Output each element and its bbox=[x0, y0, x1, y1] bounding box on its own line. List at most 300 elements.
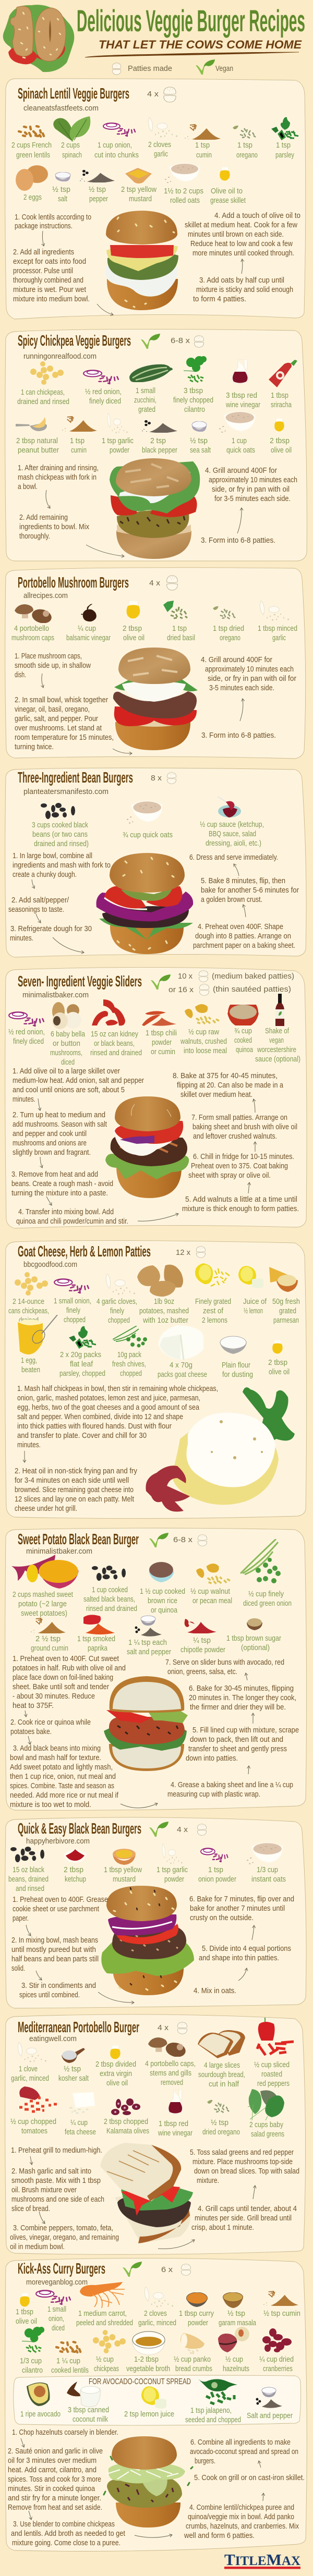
step 2: smooth paste. Mix with 1 tbsp bbox=[11, 2177, 101, 2185]
arrow bbox=[32, 880, 34, 888]
step 4 bbox=[16, 1208, 128, 1226]
arrow bbox=[243, 905, 246, 917]
step 1: 1. After draining and rinsing, bbox=[18, 464, 99, 472]
step 2: 2. Add remaining bbox=[19, 514, 68, 522]
step 2: oil. Brush mixture over bbox=[11, 2186, 77, 2194]
step 7 bbox=[191, 1114, 297, 1141]
patties count: 4 x bbox=[147, 90, 159, 99]
step 2: heat. Add carrot, cilantro, and bbox=[8, 2466, 97, 2474]
ingredient: black pepper bbox=[142, 420, 177, 455]
step 2: half beans and bean parts still bbox=[11, 1955, 99, 1963]
panel: Quick & Easy Black Bean Burgers bbox=[5, 1817, 306, 2008]
step 1: potatoes in half. Rub with olive oil and bbox=[13, 1664, 126, 1672]
patties count: medium baked bbox=[178, 971, 294, 982]
arrow bbox=[135, 2535, 172, 2537]
step 2 bbox=[13, 1111, 107, 1157]
ingredient: ketchup bbox=[64, 1849, 87, 1884]
arrow bbox=[237, 508, 242, 533]
step 4: Reduce heat to low and cook a few bbox=[190, 240, 293, 248]
ingredient: olive oil bbox=[95, 2045, 136, 2087]
ingredient: worcestershire sauce: worcestershire bbox=[257, 1046, 296, 1054]
ingredient: hazelnuts: hazelnuts bbox=[223, 2365, 249, 2373]
arrow bbox=[259, 2461, 261, 2468]
ingredient: red onion bbox=[83, 370, 122, 406]
panel: Goat Cheese, Herb & Lemon Patties bbox=[5, 1240, 307, 1519]
ingredient: instant oats bbox=[247, 1842, 286, 1884]
ingredient: onion: onion, bbox=[49, 2315, 64, 2323]
ingredient: walnut meal: or pecan meal bbox=[192, 1597, 232, 1605]
step 3: 3. Form into 6-8 patties. bbox=[201, 731, 276, 740]
step 4 bbox=[184, 2504, 299, 2540]
step 1: minutes. bbox=[13, 1095, 35, 1104]
ingredient: lemon juice bbox=[124, 2386, 174, 2419]
step 1: paper. bbox=[13, 1914, 29, 1923]
ingredient: chives: fresh chives, bbox=[112, 1360, 146, 1369]
ingredient: coconut milk bbox=[67, 2382, 109, 2424]
step 2: oil for 3 minutes over medium bbox=[8, 2457, 97, 2465]
ingredient: cilantro: cilantro bbox=[184, 406, 205, 414]
ingredient: ketchup: 2 tbsp bbox=[64, 1866, 83, 1874]
ingredient: kosher salt: ½ tsp bbox=[64, 2065, 81, 2073]
step 5: 5. Fill lined cup with mixture, scrape bbox=[192, 1726, 299, 1735]
ingredient: onion bbox=[54, 1279, 91, 1324]
ingredient: sweet potato: 2 cups mashed sweet bbox=[13, 1591, 73, 1599]
step 2 bbox=[15, 1467, 138, 1513]
step 1: salt and pepper. When combined, divide into 12 and shape bbox=[17, 1413, 183, 1421]
burger illustration bbox=[96, 853, 193, 954]
step 7 bbox=[165, 1658, 284, 1676]
step 5: bake for another 5-6 minutes for bbox=[201, 886, 299, 895]
step 5: 5. Divide into 4 equal portions bbox=[202, 1945, 291, 1953]
step 2: cheese under hot grill. bbox=[15, 1505, 77, 1513]
step 1: place face down on foil-lined baking bbox=[13, 1674, 113, 1682]
ingredient: cilantro: cilantro bbox=[22, 2366, 43, 2375]
vegan mark bbox=[123, 2262, 142, 2277]
ingredient: goat cheese bbox=[158, 1325, 207, 1379]
patties count: thin sauteed bbox=[168, 984, 291, 995]
ingredient: kosher salt bbox=[58, 2048, 89, 2083]
arrow bbox=[21, 2438, 24, 2447]
ingredient: cumin: ½ tsp cumin bbox=[263, 2310, 300, 2318]
logo: TitleMax: TITLEMAX bbox=[224, 2550, 300, 2569]
ingredient: parsley: parsley, chopped bbox=[59, 1370, 105, 1378]
ingredient: green onion: ½ cup finely bbox=[248, 1590, 284, 1598]
ingredient: goat cheese: packs goat cheese bbox=[158, 1371, 207, 1379]
ingredient: lentils: 2 cups French bbox=[11, 141, 52, 150]
ingredient: red onion bbox=[8, 1012, 45, 1046]
ingredient: balsamic vinegar: balsamic vinegar bbox=[66, 634, 111, 642]
ingredient: roasted red peppers bbox=[254, 2018, 294, 2088]
ingredient: sweet potato: potato (~2 large bbox=[18, 1600, 67, 1608]
source: moreveganblog.com bbox=[26, 2278, 88, 2287]
step 5: and shape into thin patties. bbox=[199, 1954, 279, 1962]
ingredient: sweet potato bbox=[11, 1555, 79, 1618]
ingredient: oregano bbox=[233, 126, 258, 160]
step 5: 5. Add walnuts a little at a time until bbox=[185, 1195, 297, 1204]
heading: Quick & Easy Black Bean Burgers bbox=[18, 1821, 141, 1837]
step 1: egg, herbs, two of the goat cheeses and a good amount of sea bbox=[17, 1403, 200, 1412]
ingredient: garlic: garlic, minced bbox=[11, 2074, 49, 2083]
ingredient: cilantro: finely chopped bbox=[173, 396, 213, 405]
ingredient: walnut meal: ½ cup walnut bbox=[190, 1588, 230, 1596]
ingredient: green onion bbox=[240, 1539, 292, 1608]
ingredient: parsley bbox=[271, 117, 298, 160]
ingredient: potatoes: potatoes, mashed bbox=[139, 1307, 189, 1315]
source: minimalistbaker.com bbox=[26, 1547, 92, 1556]
arrow bbox=[25, 1711, 26, 1717]
step 1: into thick patties with floured hands. Dust with flour bbox=[17, 1422, 172, 1431]
ingredient: lemon juice bbox=[238, 1266, 267, 1315]
ingredient: black beans: salted black beans, bbox=[83, 1595, 135, 1604]
step 6 bbox=[188, 1153, 294, 1180]
ingredient: black beans: beans (or two cans bbox=[32, 831, 88, 839]
ingredient: brown rice bbox=[140, 1562, 185, 1615]
ingredient: mustard: 2 tsp yellow bbox=[121, 186, 156, 194]
step 3: Add sweet potato and lightly mash, bbox=[10, 1763, 113, 1772]
ingredient: garlic powder: powder bbox=[164, 1875, 184, 1884]
ingredient: red wine vinegar: 3 tbsp red bbox=[226, 392, 257, 400]
ingredient: cumin: 1 tsp bbox=[70, 437, 85, 445]
ingredient: chickpeas: ½ cup bbox=[96, 2355, 114, 2364]
ingredient: quick oats: ¾ cup quick oats bbox=[123, 831, 173, 839]
ingredient: black beans: 1 cup cooked bbox=[92, 1586, 128, 1594]
step 1 bbox=[18, 464, 99, 491]
ingredient: portobello caps: removed bbox=[161, 2079, 183, 2087]
subtitle: THAT LET THE COWS COME HOME bbox=[99, 38, 302, 51]
ingredient: instant oats: instant oats bbox=[251, 1875, 286, 1884]
arrow bbox=[248, 1182, 249, 1193]
patties count: 4 x bbox=[149, 579, 161, 588]
ingredient: sourdough bread: sourdough bread, bbox=[198, 2071, 245, 2079]
step 6: sheet with spray or olive oil. bbox=[188, 1171, 271, 1180]
step 1: cookie sheet or use parchment bbox=[13, 1905, 99, 1913]
step 3 bbox=[11, 1170, 113, 1198]
ingredient: jalapeno bbox=[185, 2378, 241, 2424]
step 2 bbox=[11, 1936, 99, 1973]
step 5: down into patties. bbox=[186, 1754, 238, 1763]
ingredient: onion: cut into chunks bbox=[94, 151, 139, 160]
patties count bbox=[149, 576, 177, 590]
ingredient: flour bbox=[220, 1336, 253, 1379]
step 4: 4. Preheat oven 400F. Shape bbox=[198, 923, 283, 931]
source: runningonrealfood.com bbox=[23, 352, 97, 361]
ingredient: garlic: 2 cloves bbox=[148, 141, 171, 149]
step 4 bbox=[193, 923, 295, 950]
arrow bbox=[234, 864, 239, 876]
patties count bbox=[161, 2264, 191, 2275]
ingredient: sea salt: ½ tsp bbox=[190, 437, 208, 445]
step 4 bbox=[185, 212, 300, 258]
ingredient: minced garlic: garlic bbox=[272, 634, 286, 642]
ingredient: flour: Plain flour bbox=[222, 1361, 250, 1370]
ingredient: sauce: ½ cup sauce (ketchup, bbox=[200, 821, 264, 829]
step 3: 3. Refrigerate dough for 30 bbox=[10, 925, 92, 933]
step 1: medium-low heat. Add onion, salt and pepper bbox=[13, 1077, 144, 1085]
step 4: 4. Grease a baking sheet and line a ¼ cup bbox=[171, 1781, 293, 1789]
ingredient: egg: beaten bbox=[21, 1366, 40, 1374]
ingredient: eggs: 2 eggs bbox=[23, 193, 42, 202]
ingredient: chickpeas bbox=[93, 2330, 126, 2373]
step 2: 2. Sauté onion and garlic in olive bbox=[8, 2447, 103, 2456]
ingredient: red onion: ½ red onion, bbox=[8, 1028, 45, 1036]
ingredient: lentils: cooked lentils bbox=[51, 2366, 89, 2375]
ingredient: panko: bread crumbs bbox=[175, 2365, 212, 2373]
ingredient: yellow mustard: mustard bbox=[113, 1875, 136, 1884]
step 3: mixture is too wet to mold. bbox=[10, 1801, 91, 1809]
ingredient: cranberries bbox=[259, 2328, 294, 2373]
ingredient: lemon juice: ½ lemon bbox=[244, 1307, 263, 1315]
step 2: 2. Turn up heat to medium and bbox=[13, 1111, 105, 1119]
ingredient: walnuts: into loose meal bbox=[184, 1047, 227, 1055]
ingredient: pepper: pepper bbox=[89, 195, 108, 203]
ingredient: parmesan bbox=[269, 1267, 300, 1325]
arrow bbox=[53, 937, 84, 953]
ingredient: smoked paprika: paprika bbox=[88, 1644, 108, 1653]
panel: Portobello Mushroom Burgers bbox=[5, 568, 306, 759]
patties count bbox=[158, 2022, 187, 2034]
source: allrecipes.com bbox=[23, 592, 68, 600]
step 2: mushrooms and one side of each bbox=[11, 2195, 104, 2204]
patties count: 4 x bbox=[177, 1826, 188, 1834]
ingredient: garlic: garlic bbox=[154, 150, 168, 158]
step 4: dough into 8 patties. Arrange on bbox=[195, 932, 291, 941]
ingredient: red wine vinegar bbox=[225, 359, 260, 409]
step 2 bbox=[15, 696, 114, 751]
ingredient: cumin: 1 tsp bbox=[195, 141, 210, 150]
step 2: seasonings to taste. bbox=[8, 906, 64, 914]
ingredient: cumin bbox=[31, 1618, 68, 1653]
step 1: 1. Preheat oven to 400F. Cut sweet bbox=[13, 1655, 119, 1663]
step 2: room temperature for 15 minutes, bbox=[15, 734, 114, 742]
step 1 bbox=[15, 213, 91, 230]
arrow bbox=[39, 2212, 45, 2224]
ingredient: dried oregano bbox=[202, 2100, 240, 2137]
vegan mark bbox=[151, 974, 171, 990]
ingredient: parsley: parsley bbox=[275, 151, 295, 160]
step 4: 4. Transfer into mixing bowl. Add bbox=[18, 1208, 114, 1216]
ingredient: kidney beans: rinsed and drained bbox=[90, 1049, 142, 1057]
ingredient: portobello caps: mushroom caps bbox=[11, 634, 54, 642]
ingredient: garlic bbox=[138, 2287, 176, 2327]
arrow bbox=[252, 1713, 254, 1724]
ingredient: peanut butter: 2 tbsp natural bbox=[16, 437, 58, 445]
step 2: 12 slices and lay one on each patty. Melt bbox=[15, 1495, 134, 1504]
arrow bbox=[158, 2240, 195, 2249]
ingredient: cumin bbox=[263, 2291, 300, 2318]
step 3: mixture is sticky and solid enough bbox=[196, 286, 293, 294]
arrow bbox=[252, 1925, 254, 1940]
sub-panel heading: FOR AVOCADO-COCONUT SPREAD bbox=[89, 2377, 191, 2386]
ingredient: minced garlic bbox=[258, 601, 297, 642]
step 4: approximately 10 minutes each bbox=[209, 476, 297, 484]
ingredient: cranberries: cranberries bbox=[263, 2365, 293, 2373]
ingredient: salt and pepper: 1 ¼ tsp each bbox=[128, 1639, 167, 1647]
ingredient: chickpeas: drained bbox=[19, 1316, 39, 1325]
step 5 bbox=[182, 1195, 299, 1213]
step 2: Remove from heat and set aside. bbox=[8, 2504, 102, 2512]
step 1: mash chickpeas with fork in bbox=[18, 473, 97, 482]
ingredient: zucchini: 1 small bbox=[136, 387, 155, 395]
step 2: spices. Toss and cook for 3 more bbox=[8, 2475, 101, 2484]
step 3 bbox=[193, 276, 293, 303]
ingredient: potatoes bbox=[137, 1265, 189, 1325]
step 4: 3-5 minutes each side. bbox=[209, 684, 274, 692]
ingredient: lentils bbox=[51, 2342, 89, 2375]
arrow bbox=[42, 674, 43, 688]
ingredient: olive oil: olive oil bbox=[123, 634, 145, 642]
step 2 bbox=[19, 514, 90, 541]
patties count bbox=[176, 1247, 206, 1258]
ingredient: worcestershire sauce bbox=[255, 994, 300, 1064]
step 3 bbox=[10, 2224, 119, 2251]
ingredient: onion powder bbox=[198, 1848, 236, 1884]
legend: patties made bbox=[112, 63, 172, 75]
ingredient: chipotle powder: ¼ tsp bbox=[193, 1637, 211, 1645]
step 2: thoroughly. bbox=[19, 532, 50, 541]
step 4: parchment paper on a baking sheet. bbox=[193, 942, 295, 950]
ingredient: garam masala: garam masala bbox=[219, 2319, 257, 2327]
panel: Spinach Lentil Veggie Burgers bbox=[5, 79, 306, 319]
step 4: skillet at medium heat. Cook for a few bbox=[185, 221, 297, 229]
step 4: 4. Combine lentil/chickpea puree and bbox=[189, 2504, 294, 2512]
step 1: 1. Chop hazelnuts coarsely in blender. bbox=[12, 2428, 118, 2437]
step 2: over mushrooms. Let stand at bbox=[15, 724, 102, 732]
patties count: 6-8 x bbox=[171, 337, 190, 345]
ingredient: balsamic vinegar: ¼ cup bbox=[78, 625, 96, 633]
step 4: well and form 6 patties. bbox=[184, 2532, 255, 2540]
patties count: 4 x bbox=[158, 2024, 169, 2032]
ingredient: chili powder: powder bbox=[152, 1039, 172, 1047]
ingredient: garlic powder bbox=[102, 413, 134, 455]
ingredient: mushrooms: diced bbox=[61, 1058, 75, 1067]
ingredient: parmesan: grated bbox=[279, 1307, 296, 1315]
step 7: 7. Form small patties. Arrange on bbox=[191, 1114, 287, 1122]
ingredient: sriracha: sriracha bbox=[271, 401, 292, 409]
step 4: quinoa and chili powder/cumin and stir. bbox=[16, 1217, 128, 1226]
ingredient: red wine vinegar: wine vinegar bbox=[158, 2129, 192, 2138]
step 2: slightly brown and fragrant. bbox=[13, 1149, 91, 1157]
ingredient: red wine vinegar: wine vinegar bbox=[225, 401, 260, 409]
arrow bbox=[253, 2186, 255, 2199]
ingredient: vegetable broth bbox=[126, 2331, 170, 2373]
arrow bbox=[97, 304, 113, 315]
arrow bbox=[113, 749, 132, 753]
ingredient: parsley: 2 x 20g packs bbox=[60, 1351, 101, 1359]
ingredient: chickpeas bbox=[8, 1272, 49, 1325]
arrow bbox=[121, 1803, 158, 1808]
step 3: mixture going. Come close to a puree. bbox=[12, 2539, 121, 2547]
ingredient: potatoes: with 1oz butter bbox=[142, 1316, 188, 1325]
step 1: minutes. bbox=[17, 1441, 41, 1449]
ingredient: brown sugar: (optional) bbox=[241, 1644, 270, 1652]
ingredient: dried oregano: ½ tsp bbox=[211, 2119, 228, 2127]
ingredient: ketchup: ketchup bbox=[65, 1875, 86, 1884]
step 2 bbox=[13, 248, 90, 303]
ingredient: yellow mustard: 1 tbsp yellow bbox=[104, 1866, 142, 1874]
ingredient: onion bbox=[94, 123, 139, 160]
ingredient: avocado: 1 ripe avocado bbox=[20, 2410, 61, 2419]
ingredient: chickpeas: cans chickpeas, bbox=[8, 1307, 49, 1315]
ingredient: olive oil: 2 tbsp bbox=[268, 1359, 287, 1367]
ingredient: cumin bbox=[185, 125, 221, 160]
step 2: ingredients to bowl. Mix bbox=[19, 523, 90, 531]
step 4: for 3-5 minutes each side. bbox=[214, 495, 291, 503]
ingredient: lemon zest: zest of bbox=[203, 1307, 224, 1315]
ingredient: garlic cloves: chopped bbox=[108, 1316, 130, 1325]
ingredient: quick oats: 1 cup bbox=[232, 437, 247, 445]
ingredient: chives: 10g pack bbox=[117, 1351, 142, 1359]
panel: Kick-Ass Curry Burgers bbox=[5, 2258, 307, 2551]
ingredient: black beans: and rinsed bbox=[16, 1885, 44, 1893]
step 6: 6. Bake for 7 minutes, flip over and bbox=[189, 1895, 294, 1903]
step 4: measuring cup with plastic wrap. bbox=[167, 1790, 260, 1799]
ingredient: dried oregano: 1 tsp dried bbox=[213, 625, 244, 633]
step 3: 3. Use blender to combine chickpeas bbox=[13, 2520, 115, 2529]
burger illustration bbox=[101, 1886, 194, 1995]
ingredient: oats: rolled oats bbox=[170, 197, 200, 205]
step 6 bbox=[190, 2438, 298, 2465]
step 1 bbox=[13, 1067, 144, 1104]
ingredient: salt and pepper bbox=[247, 2387, 293, 2420]
step 5 bbox=[199, 1945, 291, 1962]
ingredient: olive oil: olive oil bbox=[106, 2079, 128, 2087]
panel: Mediterranean Portobello Burger bbox=[5, 2015, 306, 2254]
step 4: 4. Add a touch of olive oil to bbox=[214, 212, 300, 220]
ingredient: brown rice: 1 ½ cup cooked bbox=[140, 1588, 185, 1596]
heading: Three-Ingredient Bean Burgers bbox=[18, 770, 133, 786]
step 2: potatoes bake. bbox=[10, 1728, 52, 1736]
step 1: onion, garlic, mashed potatoes, lemon zest and juice, parmesan, bbox=[17, 1394, 200, 1402]
step 2: mixture into medium bowl. bbox=[13, 295, 90, 303]
burger illustration bbox=[105, 1096, 189, 1198]
step 1: - about 30 minutes. Reduce bbox=[13, 1692, 95, 1701]
ingredient: roasted red peppers: roasted bbox=[261, 2070, 282, 2079]
ingredient: olive oil: grease skillet bbox=[210, 197, 246, 205]
step 3: oil in medium bowl. bbox=[10, 2243, 65, 2251]
step 2: and stir fry for a minute longer. bbox=[8, 2494, 101, 2502]
step 2: 2. Heat oil in non-stick frying pan and fry bbox=[15, 1467, 138, 1475]
step 1: sheet. Bake until soft and tender bbox=[13, 1683, 109, 1691]
ingredient: lentils: green lentils bbox=[16, 151, 50, 160]
arrow bbox=[46, 490, 50, 508]
ingredient: garam masala: ½ tsp bbox=[227, 2310, 245, 2318]
ingredient: sweet potato: sweet potatoes) bbox=[21, 1609, 67, 1618]
patties count bbox=[171, 336, 204, 347]
ingredient: black beans: beans, drained bbox=[8, 1875, 49, 1884]
ingredient: garlic cloves bbox=[97, 1274, 137, 1325]
step 3: to form 4 patties. bbox=[193, 295, 246, 303]
ingredient: onion: diced bbox=[52, 2324, 65, 2333]
arrow bbox=[98, 1992, 134, 2003]
arrow bbox=[42, 231, 44, 246]
patties count: thin sauteed: or 16 x bbox=[168, 986, 194, 994]
ingredient: onion powder: onion powder bbox=[198, 1875, 236, 1884]
step 3: turning the mixture into a paste. bbox=[11, 1189, 108, 1198]
step 1: heat to 375F. bbox=[13, 1702, 54, 1710]
ingredient: onion: 1 small onion, bbox=[54, 1297, 91, 1305]
ingredient: sauce bbox=[200, 797, 264, 848]
arrow bbox=[246, 1673, 247, 1680]
step 7: 7. Serve on slider buns with avocado, red bbox=[165, 1658, 284, 1667]
ingredient: cumin: ground cumin bbox=[31, 1644, 68, 1653]
ingredient: red onion: finely diced bbox=[89, 397, 121, 406]
ingredient: cumin: cumin bbox=[196, 151, 212, 160]
panel: Spicy Chickpea Veggie Burgers bbox=[5, 329, 307, 561]
ingredient: chickpeas: 1 can chickpeas, bbox=[21, 388, 65, 397]
step 2: solid. bbox=[11, 1964, 25, 1973]
step 2: 2. In mixing bowl, mash beans bbox=[11, 1936, 98, 1945]
ingredient: black beans bbox=[83, 1566, 137, 1613]
